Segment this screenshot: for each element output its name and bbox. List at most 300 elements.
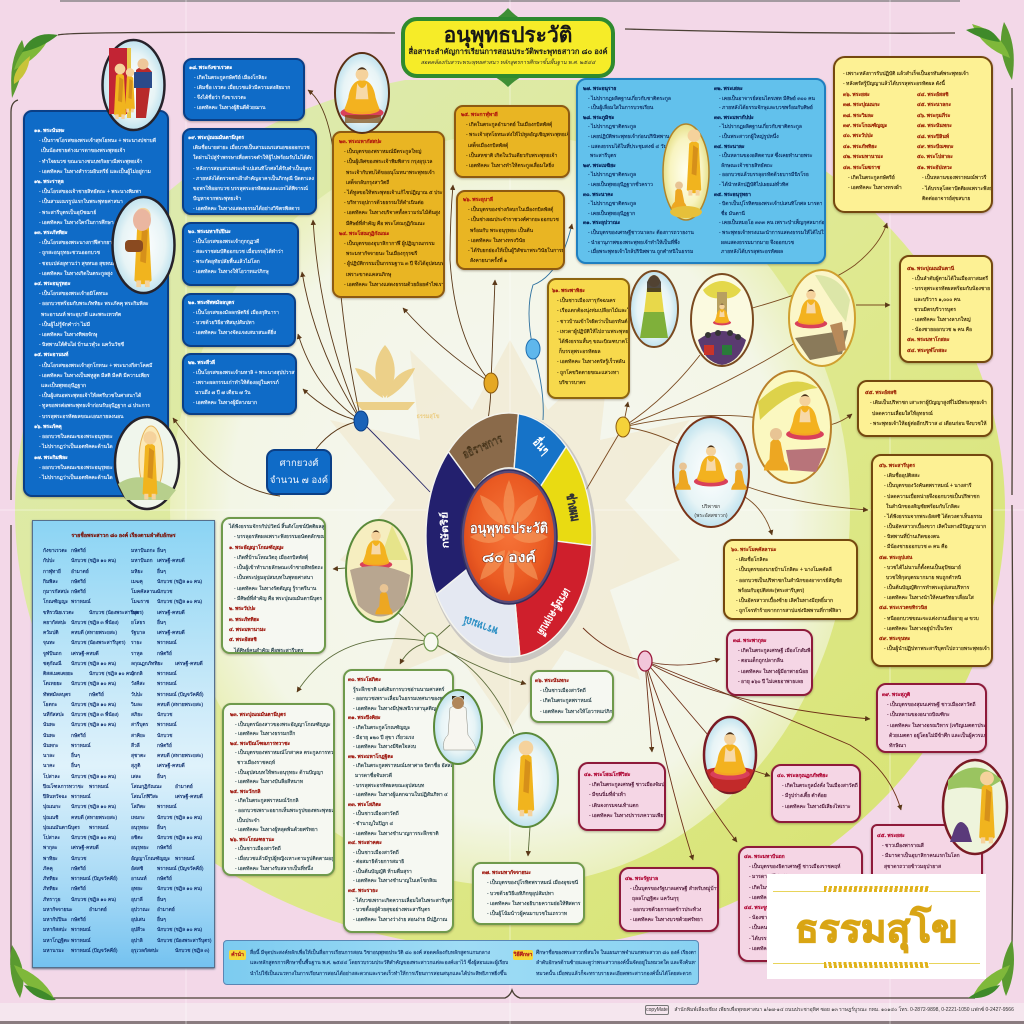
list rows: พราหมณ์ xyxy=(157,672,177,677)
panel: large blue disciples panel: - บรรลุพระอรหัตผลขณะเอนกายลงนอน xyxy=(39,414,124,420)
list rows: กษัตริย์ xyxy=(71,549,86,554)
list rows: เมฆคุ xyxy=(131,580,143,585)
list rows: นักบวช (ชฎิล ๑๐ คน) xyxy=(157,816,202,820)
panel: light-blue box: - ไม่ปรากฏชาติตระกูล xyxy=(588,172,636,178)
second column: - ไม่ปรากฏผลิตฐานเกี่ยวกับชาติตระกูล xyxy=(719,124,802,130)
second column: ลักษณะเจ้าชายสิทธัตถะ xyxy=(721,163,773,169)
panel: large blue disciples panel: - เอตทัคคะ ในทางสำรวมอินทรีย์ และเป็นผู้ไม่อยู่กาม xyxy=(39,169,151,175)
panel: pink box yasa: - ชาวเมืองพาราณสี xyxy=(882,843,924,849)
pale centre xyxy=(170,134,850,886)
list rows: นักบวช (น้องพระสารีบุตร) xyxy=(89,610,144,616)
panel: green box left lower: - เอตทัคคะ ในทางรับสลากเป็นที่หนึ่ง xyxy=(235,866,313,872)
list rows: พราหมณ์ (ปัญจวัคคีย์) xyxy=(71,877,118,882)
second column: - เคยเป็นอาจารย์สอนไตรเพท มีศิษย์ ๓๐๐ คน xyxy=(719,96,815,102)
panel: green box left lower xyxy=(222,703,335,876)
panel: light-blue box xyxy=(576,78,826,264)
bottom blue band xyxy=(223,940,699,985)
panel: sariputta box: ในสำนักของสัญชัยพร้อมกับโกลิตะ xyxy=(886,504,960,510)
second column: ๕๐. พระโปสาละ xyxy=(917,154,953,160)
list rows: อื่นๆ xyxy=(157,898,166,902)
panel: top-right yellow box: - เกิดในตระกูลกษัตริย์ xyxy=(848,175,895,181)
panel: light-blue box: ๓๐. พระนาคะ xyxy=(583,192,613,198)
list rows: ควัมปติ xyxy=(43,631,59,636)
list rows: กษัตริย์ xyxy=(71,734,86,738)
panel: large blue disciples panel: - เอตทัคคะ ในทางใคร่ในการศึกษา xyxy=(39,220,114,226)
wheel of categories: อื่นๆ xyxy=(530,433,554,458)
list rows: นักบวช xyxy=(157,590,172,595)
list rows: นักบวช (ชฎิล ๑๐ คน) xyxy=(89,672,134,677)
portrait: maha kassapa xyxy=(335,53,389,133)
list rows: นันทกะ xyxy=(43,744,58,749)
panel: large blue disciples panel: - ไม่ปรากฏว่าเป็นเอตทัคคะด้านใด xyxy=(39,475,113,481)
wheel of categories: พราหมณ์ xyxy=(461,613,500,638)
list rows: นาคะ xyxy=(43,764,55,769)
list rows: นักบวช (ชฎิล ๑๐ คน) xyxy=(71,836,116,841)
panel: light-blue box: - ไม่ปรากฏผลิตฐานเกี่ยวกับชาติตระกูล xyxy=(588,96,671,102)
panel: green box lower: - เอตทัคคะ ในทางอธิบายความย่อให้พิสดาร xyxy=(487,901,580,907)
panel: sariputta box: - ปลดความเบื่อหน่ายจึงออกบวชเป็นปริพาชก xyxy=(884,494,980,500)
list rows: เศรษฐี-คหบดี xyxy=(157,764,185,769)
list rows: ราหุล xyxy=(131,652,143,656)
list rows: นักบวช (ชฎิล ๑๐ คน) xyxy=(157,836,202,841)
node: gold centre xyxy=(484,373,498,393)
panel: large blue disciples panel: - ออกบวชในคณะของพระอนุรุทธะ xyxy=(39,465,113,471)
panel: light-blue box: ๒๙. พระเมฆิยะ xyxy=(583,163,616,169)
panel: green box left lower: - เอตทัคคะ ในทางผู้หลุดพ้นด้วยศรัทธา xyxy=(235,827,318,833)
intro tag: คำนำ xyxy=(231,952,244,958)
list rows: นักบวช (ชฎิล ๓ พี่น้อง) xyxy=(71,621,119,626)
list rows: อุรุเวลกัสสปะ xyxy=(131,949,159,954)
panel: gold box maha kassapa: - เป็นผู้เลิศของพระเจ้าพิมพิสาร กรุงอุรุเวล xyxy=(344,159,432,165)
list rows: กาฬุทายี xyxy=(43,570,61,574)
panel: punna box: - เป็นลำดับผู้ตามได้ในเมืองกาสมตรี xyxy=(912,276,988,282)
list rows: อุปเสน xyxy=(131,918,145,923)
panel: green box left lower: ๒๓. พระปุณณมันตานีบุตร xyxy=(230,712,286,718)
panel: blue box sivali: - เป็นโอรสของพระเจ้ามหาลิ + พระนางสุปปวาสา xyxy=(193,370,297,376)
panel: gold box sobhita xyxy=(454,105,570,178)
lotus logo watermark: ธรรมสุโข xyxy=(417,412,440,420)
panel: pink box subhuti: - เป็นหลานของอนาถบิณฑิกะ xyxy=(887,712,950,718)
store logo box xyxy=(767,874,986,979)
panel: green box small right: ๓๖. พระนันทกะ xyxy=(535,678,569,684)
panel: blue box sivali: นานถึง ๗ ปี ๗ เดือน ๗ วัน xyxy=(195,390,251,396)
panel: green box centre tall: - เอตทัคคะ ในทางชำนาญในเตโชกสิณ xyxy=(353,878,437,884)
panel: pink box yasa xyxy=(871,824,983,904)
list rows: นักบวช xyxy=(157,734,172,738)
list rows: พราหมณ์ xyxy=(89,826,109,831)
second column: ๓๕. พระอนุรุทธา xyxy=(714,192,751,198)
panel: assaji box xyxy=(857,380,993,437)
panel: gold box sobhita: - เป็นสหชาติ เกิดในวันเดียวกับพระพุทธเจ้า xyxy=(466,153,557,159)
panel: top-right yellow box: ๔๒. พระมหานามะ xyxy=(843,154,883,160)
panel: blue box dabbamallaputta: ขอพรให้ออกบวช บรรลุพระอรหัตผลและเถรได้พิจารณ์ xyxy=(193,186,308,192)
panel: green box left lower: - เป็นชาวเมืองสาวัตถี xyxy=(235,846,281,852)
panel: green box left lower: เป็นประจำ xyxy=(237,818,260,824)
list rows: โธตกะ xyxy=(43,703,57,708)
panel: phahiya yellow box: - เป็นชาวเมืองภารุกัจฉนคร xyxy=(557,298,615,304)
panel: pink box bakula: - เกิดในตระกูลเศรษฐี เมืองโกสัมพี xyxy=(738,648,810,654)
panel: pink box rattapala: ถุลลโกฏฐิตะ แคว้นกุรุ xyxy=(632,896,679,902)
list rows: ภัทราวุธ xyxy=(43,898,61,902)
list rows: สภิยะ xyxy=(131,713,143,718)
panel: green box lower: - เป็นผู้โน้มน้าวผู้คนมาบวชในเถรวาท xyxy=(487,911,567,917)
second column: - เคยเป็นหมอโอ ๓๓๓ คน เพราะบำเพ็ญกุศลมาก่อน xyxy=(719,220,826,226)
panel: green box centre tall: - เป็นชาวเมืองสาวัตถี xyxy=(353,811,399,817)
list rows: อื่นๆ xyxy=(157,570,166,574)
label box: shakya clan: จำนวน ๗ องค์ xyxy=(270,475,328,486)
panel: gold box sobhita: - เอตทัคคะ ในทางทำให้ตระกูลเลื่อมใสยิ่ง xyxy=(466,163,554,169)
panel: large blue disciples panel: - เป็นราชโอรสของพระเจ้าสุทโธทนะ + พระนางปชาบดี xyxy=(39,138,156,144)
panel: top-right yellow box: ๓๖. พระยสะ xyxy=(843,92,870,98)
panel: blue box dabba: - เอตทัคคะ ในทางจัดแจงเสนาสนะดียิ่ง xyxy=(193,330,276,336)
portrait: ananda standing xyxy=(115,417,179,509)
panel: green box centre tall xyxy=(343,669,454,933)
list rows: โสภิตะ xyxy=(131,805,146,810)
corner ornament top-left xyxy=(11,34,58,98)
panel: blue box kangkharewata: ๑๘. พระกังขาเรวตะ xyxy=(189,65,232,71)
list rows: สุภูติ xyxy=(131,764,140,769)
panel: moggallana box xyxy=(723,539,858,620)
lotus star behind wheel xyxy=(330,340,690,730)
list rows: นันทะ xyxy=(43,723,56,728)
list rows: นักบวช (ชฎิล ๑๐ คน) xyxy=(71,774,116,780)
panel: green box lower: ๓๗. พระมหากัจจายนะ xyxy=(482,870,531,876)
portrait: sermon under tree xyxy=(691,274,753,366)
list rows: พราหมณ์ xyxy=(157,723,177,728)
list rows: กษัตริย์ xyxy=(71,580,86,585)
list rows: นักบวช (น้องพระสารีบุตร) xyxy=(71,641,126,646)
panel: gold box maha kassapa: มีศิษย์ที่สำคัญ คือ พระโสณกุฏิกัณณะ xyxy=(346,221,425,227)
panel: green box left lower: - เป็นอุปสมบทให้พระอนุรุทธะ ด้านปัญญา xyxy=(235,770,323,776)
panel: blue box mahakappina: ๒๐. พระมหากัปปินะ xyxy=(188,229,231,235)
panel: pink box maha panthaka: - ได้บรรลุด้วยการลูบผ้าขาว xyxy=(749,936,808,942)
panel: blue box dabbamallaputta: - ภายหลังได้ตรวจตาเฝ้าสำคัญอาคาเป็นภิกษุณี ปัดตาเลง xyxy=(193,176,314,182)
panel: green box centre tall: รู้ระลึกชาติ แต่เดิมการบวชอ่านนามศาสตร์ xyxy=(353,687,444,693)
list rows: โมคคัลลานะ xyxy=(131,590,158,595)
panel: pink box sona: - เดินจงกรมจนเท้าแตก xyxy=(589,803,638,809)
panel: pink box maha panthaka: ๔๔. พระจูฬปันถก xyxy=(744,905,782,911)
ornament strip top xyxy=(824,886,929,892)
panel: green box lower: - บวชด้วยวิธีเอหิภิกขุอุปสัมปทา xyxy=(487,891,554,897)
connectors: gold top node xyxy=(403,185,495,420)
panel: pink box lakuntaka: - เอตทัคคะ ในทางมีเสียงไพเราะ xyxy=(782,804,851,810)
panel: green box pancavaggi: ๓. พระภัททิยะ xyxy=(229,617,259,623)
list rows: อื่นๆ xyxy=(71,764,80,769)
panel: gold box sobhita: - พระเจ้าสุทโธทนะส่งให้ไปทูลอัญเชิญพระพุทธเจ้า xyxy=(466,132,570,138)
panel: pink box sona: - เอตทัคคะ ในทางปรารภความเพียร xyxy=(589,813,666,819)
list rows: จูฬปันถก xyxy=(43,652,62,656)
list rows: จุนทะ xyxy=(43,641,55,646)
list rows: คหบดี (สหายพระยสะ) xyxy=(71,631,117,636)
panel: phahiya yellow box: ก็บรรลุพระอรหัตผล xyxy=(559,349,601,355)
panel: pink box maha panthaka: ๔๓. พระมหาปันถก xyxy=(744,854,785,860)
panel: gold box sobhita: - เกิดในตระกูลอำมาตย์ ในเมืองกบิลพัสดุ์ xyxy=(466,122,552,128)
panel: blue box kangkharewata: - เอตทัคคะ ในทางผู้ยินดีด้วยฌาน xyxy=(194,105,265,111)
portrait: seated monk xyxy=(704,717,756,793)
panel: pink box maha panthaka: - เป็นคนปัญญาทึบ xyxy=(749,925,788,931)
list rows: อื่นๆ xyxy=(157,549,166,554)
panel: large blue disciples panel: - ทูลขอพรต่อพระพุทธเจ้าก่อนรับอุปัฏฐาก ๘ ประการ xyxy=(39,403,150,409)
list rows: มหาโกฏฐิตะ xyxy=(43,938,70,944)
panel: green box centre tall: - ต่อสมาธิด้วยการสมาธิ xyxy=(353,859,404,865)
panel: green box centre tall: - ได้บวชเพราะเกิดความเลื่อมใสในพระสารีบุตร xyxy=(353,898,453,904)
list rows: อุปาลิ xyxy=(131,938,143,944)
panel: pink box rattapala: - เอตทัคคะ ในทางบวชด้วยศรัทธา xyxy=(630,917,703,923)
panel: sariputta box: - หนีออกบวชขณะจะแต่งงานเมื่ออายุ ๗ ขวบ xyxy=(884,616,979,622)
panel: green box centre tall: - เป็นต้นบัญญัติ ห้ามดื่มสุรา xyxy=(353,869,412,875)
panel: large blue disciples panel: - พระสารีบุตรเป็นอุปัชฌาย์ xyxy=(39,210,96,216)
second column: ๓๔. พระนาละ xyxy=(714,144,745,150)
list rows: พากุละ xyxy=(43,846,58,851)
panel: large blue disciples panel: - ทำใจผนวช ขณะนางชนบทกัลยาณีพระพุทธเจ้า xyxy=(39,159,142,165)
connectors: shakya node xyxy=(173,90,430,496)
panel: green box centre tall: - เอตทัคคะ ในทางมีปุพเพนิวาสานุสติญาณ xyxy=(353,706,444,712)
panel: green box pancavaggi: ๒. พระวัปปะ xyxy=(229,606,256,612)
wheel of categories xyxy=(426,413,596,663)
list rows: นักบวช (ชฎิล ๑๐ คน) xyxy=(71,682,116,687)
panel: green box pancavaggi: - เอตทัคคะ ในทางรัตตัญญู รู้ราตรีนาน xyxy=(234,586,316,592)
panel: light-blue box: ๒๗. พระอนุราธ xyxy=(583,86,616,92)
panel: blue box mahakappina: - เป็นโอรสของพระเจ้ากุกกุฏวดี xyxy=(193,239,259,245)
list rows: อัญญาโกณฑัญญะ xyxy=(131,856,170,862)
panel: light-blue box: - นำอานุภาพของพระพุทธเจ้าทำให้เป็นที่พึ่ง xyxy=(588,240,680,246)
panel: pink box maha panthaka: - น้องชายพระมหาปันถก xyxy=(749,915,801,921)
panel: blue box kangkharewata: - เดิมชื่อ เรวตะ เมื่อบวชแล้วมีความสงสัยมาก xyxy=(194,85,290,91)
panel: sariputta box: - เป็นอัครสาวกเบื้องขวา เลิศในทางมีปัญญามาก xyxy=(884,524,986,530)
list rows: อื่นๆ xyxy=(157,774,166,780)
list rows: อำมาตย์ xyxy=(89,908,107,913)
panel: pink box bakula: - ตอนเด็กถูกปลากลืน xyxy=(738,658,783,664)
list rows: นันทะ xyxy=(43,734,56,738)
panel: blue box dabbamallaputta xyxy=(182,128,317,215)
panel: large blue disciples panel: - เป็นโอรสของพระนางกาฬีศากยานี xyxy=(39,240,115,246)
list rows: นักบวช (ชฎิล ๑๐ คน) xyxy=(157,600,202,605)
list rows: โปสาละ xyxy=(43,836,60,841)
list rows: โสณกุฏิกัณณะ xyxy=(131,785,162,790)
list rows: โปสาละ xyxy=(43,774,60,780)
wheel centre text: อนุพุทธประวัติ xyxy=(470,520,548,537)
list rows: โมฆราช xyxy=(131,600,149,605)
panel: green box centre tall: - เอตทัคคะ ในทางว่าง่าย สอนง่าย มีปฏิภาณ xyxy=(353,917,447,923)
list rows: กษัตริย์ xyxy=(157,652,172,656)
list rows: สารีบุตร xyxy=(131,723,148,728)
panel: blue box sivali xyxy=(182,353,297,415)
panel: large blue disciples panel: - เป็นผู้เสนอพระพุทธเจ้าให้สตรีบวชในศาสนาได้ xyxy=(39,393,141,399)
panel: gold box sobhita: ๒๕. พระกาฬุทายี xyxy=(461,112,498,118)
list rows: อื่นๆ xyxy=(157,621,166,626)
panel: assaji box: - เดิมเป็นปริพาชก เสาะหาผู้ปัญญาสูงที่ไม่มีพระพุทธเจ้า xyxy=(870,400,987,406)
panel: pink box subhuti: - เป็นบุตรของสุมนเศรษฐี ชาวเมืองสาวัตถี xyxy=(887,702,976,708)
panel: phahiya yellow box xyxy=(547,278,630,399)
second column: - ภายหลังได้ธรรมจักษุและบวชพร้อมกับศิษย์ xyxy=(719,105,813,111)
panel: sariputta box: ๕๙. พระจุนทะ xyxy=(879,636,910,642)
panel: green box left lower: - เกิดในตระกูลพราหมณ์วักกลิ xyxy=(235,798,299,804)
panel: moggallana box: - เป็นอัครสาวกเบื้องซ้าย เลิศในทางมีฤทธิ์มาก xyxy=(736,598,833,604)
portrait: wanderers: (พระอัสสชาวก) xyxy=(694,513,728,519)
panel: punna box xyxy=(899,255,993,363)
list rows: โกณฑัญญะ xyxy=(43,600,68,605)
wheel of categories: เศรษฐี-คฤหบดี xyxy=(534,586,574,638)
list rows: ภัคคุ xyxy=(43,867,53,872)
list rows: อำมาตย์ xyxy=(71,570,89,574)
panel: sariputta box: บวชให้กุลบุตรมากมาย พบถูกตำหนิ xyxy=(886,575,961,581)
panel: large blue disciples panel: - เป็นโอรสของพระเจ้าอมิโตทนะ xyxy=(39,291,108,297)
wheel of categories: ช่างผม xyxy=(563,492,581,522)
list rows: นักบวช (ชฎิล ๑๐ คน) xyxy=(71,662,116,667)
second column: - เป็นพระสาวกผู้ใหญ่รูปหนึ่ง xyxy=(719,134,779,140)
panel: large blue disciples panel: - เป็นโอรสของเจ้าชายสิทธัตถะ + พระนางพิมพา xyxy=(39,189,141,195)
second column: ๔๗. พระนันทกะ xyxy=(917,123,952,129)
list rows: พราหมณ์ xyxy=(71,938,91,944)
panel: gold box maha kassapa: - ผู้ปฏิบัติกรรมเป็นกรรมฐาน ๓ ปี จึงได้อุปสมบท xyxy=(344,261,444,267)
panel: green box small right: - เกิดในตระกูลพราหมณ์ xyxy=(540,698,592,704)
node: shakya xyxy=(354,411,368,431)
panel: light-blue box: - เคยเป็นพุทธอุปัฏฐากชั่วคราว xyxy=(588,182,653,188)
list rows: กษัตริย์ xyxy=(157,744,172,749)
publisher logo xyxy=(645,1005,669,1015)
panel: green box pancavaggi xyxy=(221,517,326,654)
second column: ติดต่ออาจารย์สุขสบาย xyxy=(922,196,970,202)
panel: phahiya yellow box: - เอตทัคคะ ในทางตรัสรู้เร็วพลัน xyxy=(557,359,625,365)
panel: sariputta box: ๕๘. พระเรวตขทิรวนิย xyxy=(879,605,927,611)
panel: punna box: และบริวาร ๑,๐๐๐ คน xyxy=(914,297,960,303)
list rows: กษัตริย์ xyxy=(157,846,172,851)
intro text xyxy=(250,948,508,977)
panel: blue box dabbamallaputta: ๑๙. พระปุณณมันตานีบุตร xyxy=(188,135,244,141)
list rows: อุทยะ xyxy=(131,887,143,892)
second column xyxy=(714,86,826,255)
panel: large blue disciples panel: ๑๕. พระอานนท์ xyxy=(34,352,68,358)
list rows xyxy=(42,546,212,954)
panel: green box left lower: - เอตทัคคะ ในทางธรรมกถึก xyxy=(235,731,295,737)
panel: gold box maha kassapa: เพราะขาดแคลนภิกษุ xyxy=(346,272,391,278)
panel: pink box subhuti: ทักษิณา xyxy=(889,743,906,749)
node: pink xyxy=(638,651,652,671)
usage tag xyxy=(513,950,533,960)
second column: - เป็นหลานของพราหมณ์พาวรี xyxy=(922,175,986,181)
panel: gold box maha kassapa: - เป็นบุตรของพราหมณ์มีตระกูลใหญ่ xyxy=(344,149,421,155)
panel: moggallana box: - ออกบวชเป็นปริพาชกในสำนักของอาจารย์สัญชัย xyxy=(736,578,842,584)
panel: light-blue box: - เป็นบุตรของเศรษฐีชาวนาลกะ ต้องการถวายงาน xyxy=(588,230,694,236)
panel: pink box maha panthaka: - เกิดในระหว่างทาง xyxy=(749,885,791,891)
list rows: เศรษฐี-คหบดี xyxy=(175,662,203,667)
panel: light-blue box: ๒๘. พระภูมิชะ xyxy=(583,115,614,121)
panel: green box left lower: ๒๔. พระปิณโฑลภารทวาชะ xyxy=(230,741,290,747)
usage text xyxy=(536,948,696,977)
panel: large blue disciples panel: - เป็นโอรสของพระเจ้าสุกโกทนะ + พระนางกีสาโคตมี xyxy=(39,363,152,369)
panel: green box centre tall: - เอตทัคคะ ในทางผู้แตกฉานในปฏิสัมภิทา ๔ xyxy=(353,792,448,798)
panel: gold box upali: สังคายนาครั้งที่ ๑ xyxy=(470,258,507,264)
panel: green box centre tall: ๓๒. พระมหาโกฏฐิตะ xyxy=(348,754,393,760)
second column: ๔๖. พระกุมภีระ xyxy=(917,113,950,119)
list rows: ปิณโฑลภารทวาชะ xyxy=(43,785,84,790)
panel: blue box kangkharewata xyxy=(183,58,305,121)
panel: gold box upali: ๒๖. พระอุบาลี xyxy=(463,197,493,203)
connectors: pink node xyxy=(583,628,901,860)
list rows: ยสะ xyxy=(131,610,139,616)
node: yellow xyxy=(616,417,630,437)
list rows: เศรษฐี-คหบดี xyxy=(71,846,99,851)
panel: gold box upali: - เอตทัคคะ ในทางทรงวินัย xyxy=(468,238,525,244)
panel: gold box sobhita: เสด็จเมืองกบิลพัสดุ์ xyxy=(468,143,508,149)
portrait: king and monk xyxy=(102,40,164,130)
panel: punna box: ๕๓. พระมหาโกสละ xyxy=(907,337,950,343)
list rows: สีวลี xyxy=(131,744,140,749)
portrait: phahiya woman xyxy=(630,271,678,347)
panel: large blue disciples panel: ๑๖. พระภัคคุ xyxy=(34,424,62,430)
list rows: นักบวช (ชฎิล ๑๐ คน) xyxy=(157,887,202,892)
portrait: standing monk xyxy=(494,733,558,827)
panel: blue box dabba xyxy=(182,293,296,347)
panel: large blue disciples panel: ๑๓. พระภัททิยะ xyxy=(34,230,68,236)
panel: punna box: - บรรลุพระอรหัตผลพร้อมกับน้องชาย xyxy=(912,286,990,292)
panel: green box pancavaggi: - เกิดที่บ้านโทณวัตถุ เมืองกบิลพัสดุ์ xyxy=(234,555,308,561)
panel: pink box rattapala: - ออกบวชด้วยการอดข้าวประท้วง xyxy=(630,907,701,913)
panel: blue box dabbamallaputta: ปัญหาจากพระพุทธเจ้า xyxy=(193,196,241,202)
list rows: นักบวช (น้องพระสารีบุตร) xyxy=(157,938,212,944)
panel: pink box yasa: ๔๕. พระยสะ xyxy=(877,833,905,839)
list rows: นักบวช (ชฎิล ๑๐ คน) xyxy=(71,559,116,564)
list rows: พราหมณ์ xyxy=(157,805,177,810)
panel: phahiya yellow box: ๖๑. พระพาหิยะ xyxy=(552,288,585,294)
list rows: พราหมณ์ xyxy=(175,856,195,862)
list rows: ติสสเมตเตยยะ xyxy=(43,672,73,677)
list rows: เสละ xyxy=(131,774,141,780)
panel: moggallana box: - ถูกโจรทำร้ายจากการสาปแช่งนิพพานที่กาฬสิลา xyxy=(736,608,841,614)
wheel centre text: ๘๐ องค์ xyxy=(482,549,536,565)
list rows: พราหมณ์ (ปัญจวัคคีย์) xyxy=(71,949,118,954)
list rows: ราธะ xyxy=(131,641,142,646)
panel: top-right yellow box: - เอตทัคคะ ในทางทรงผ้า xyxy=(848,185,902,191)
panel: punna box: - เอตทัคคะ ในทางลาภใหญ่ xyxy=(912,317,971,323)
panel: pink box bakula xyxy=(726,629,813,696)
panel: large blue disciples panel: - เอตทัคคะ ในทางเกิดในตระกูลสูง xyxy=(39,271,113,277)
panel: blue box dabba: ๒๑. พระทัพพมัลลบุตร xyxy=(188,300,234,306)
subtitle small: สอดคล้องกับสาระพระพุทธศาสนา หลักสูตรการศึกษาขั้นพื้นฐาน พ.ศ. ๒๕๔๔ xyxy=(421,60,595,66)
panel: gold box upali: - เป็นช่างผมประจำราชวงศ์ศากยะออกบวช xyxy=(468,217,559,223)
list rows: มหานามะ xyxy=(43,949,64,954)
panel: sariputta box: - ได้ฟังธรรมจากพระอัสสชิ ได้ดวงตาเห็นธรรม xyxy=(884,514,982,520)
list rows: พราหมณ์ (ปัญจวัคคีย์) xyxy=(157,692,204,698)
list rows: กุมารกัสสปะ xyxy=(43,590,69,595)
panel: light-blue box: - เมื่อพระพุทธเจ้าใกล้ปรินิพพาน ถูกตำหนิในธรรม xyxy=(588,249,693,255)
list rows: เหมกะ xyxy=(131,816,145,820)
list rows: นักบวช (ชฎิล ๑๐ คน) xyxy=(71,703,116,708)
list rows: วิมละ xyxy=(131,703,143,708)
list rows: อานนท์ xyxy=(131,877,147,882)
panel: sariputta box: - นิพพานที่บ้านเกิดของตน xyxy=(884,534,940,540)
panel: pink box yasa: สุชาดาถวายข้าวมธุปายาส xyxy=(884,864,941,870)
list rows: สาคิยะ xyxy=(131,734,146,738)
panel: green box pancavaggi: ๔. พระมหานามะ xyxy=(229,627,266,633)
list rows: กษัตริย์ xyxy=(71,887,86,892)
list rows: คหบดี (สหายพระยสะ) xyxy=(157,703,203,708)
portrait: assaji xyxy=(753,371,831,483)
list rows: รัฐบาล xyxy=(131,631,145,636)
panel: pink box subhuti xyxy=(876,683,987,753)
panel: blue box mahakappina: - สละราชสมบัติออกบวช เมื่อบรรลุได้ทำว่า xyxy=(193,249,283,255)
panel: sariputta box: - เอตทัคคะ ในทางนำให้คนศรัทธาเลื่อมใส xyxy=(884,595,974,601)
list rows: มหาปันถกะ xyxy=(131,549,155,554)
list rows: กษัตริย์ xyxy=(71,590,86,595)
panel: blue box dabbamallaputta: ใดผ่านไปสู่รำพรรษาเพื่อตรวจตำให้ผู้ไปพร้อมรับไม่ได้สัก xyxy=(193,155,313,161)
list rows: เศรษฐี-คหบดี xyxy=(157,610,185,616)
wheel labels: อธิราชการ xyxy=(461,432,505,462)
node: pale green xyxy=(424,633,438,651)
panel: phahiya yellow box: - ถูกโคขวิดตายขณะแสวงหา xyxy=(557,370,619,376)
panel: large blue disciples panel: - เป็นผู้ไม่รู้จักคำว่า ไม่มี xyxy=(39,322,90,328)
panel: large blue disciples panel: ๑๒. พระราหุล xyxy=(34,179,64,185)
